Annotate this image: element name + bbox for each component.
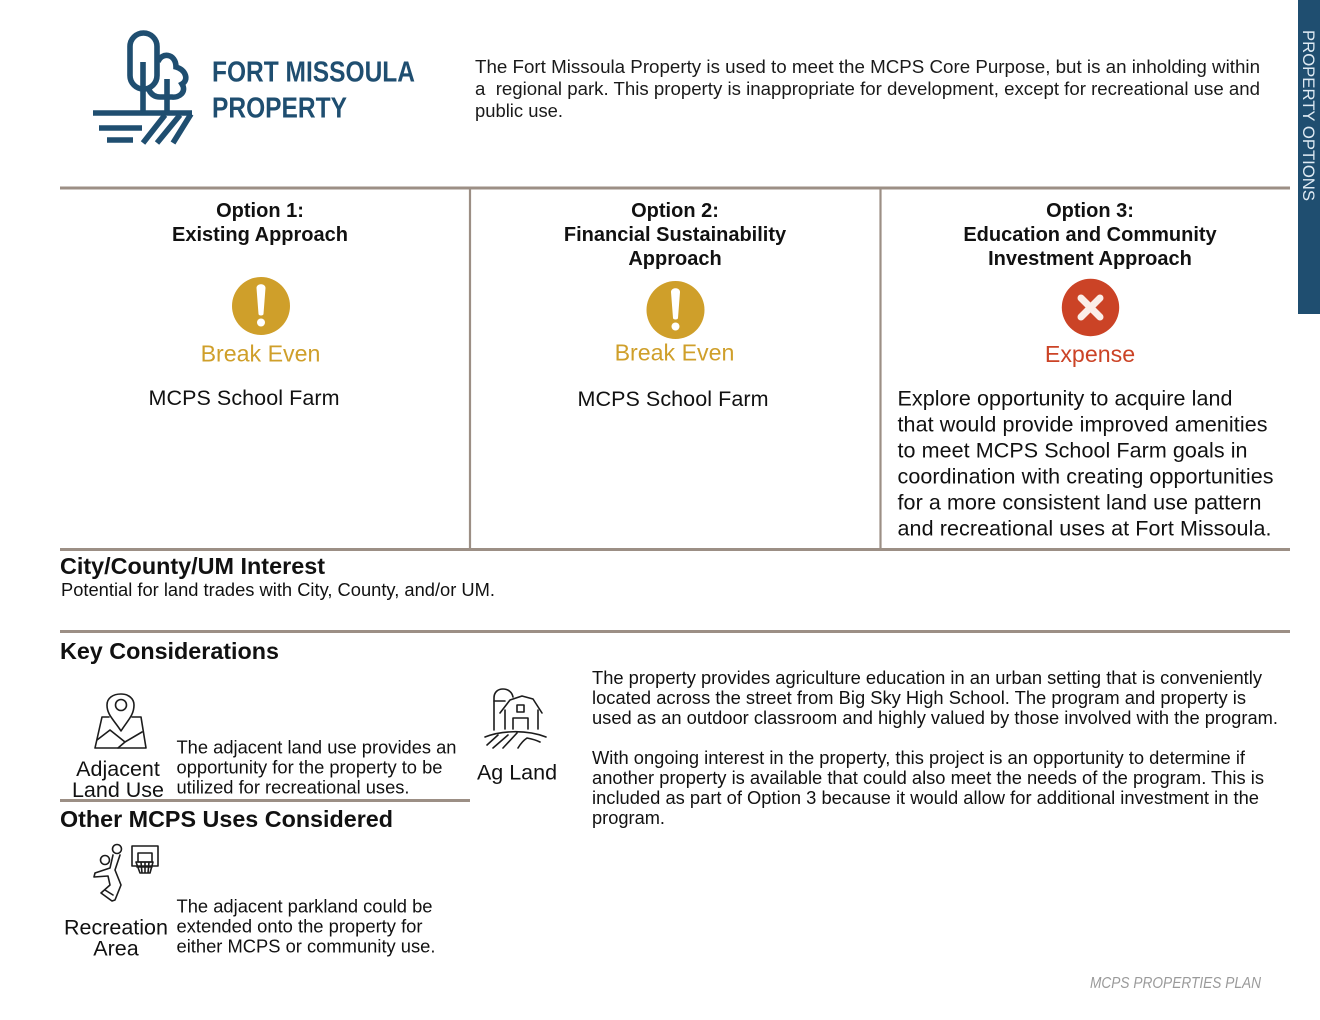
body text: Potential for land trades with City, County, and/or UM. (61, 580, 495, 600)
description (176, 738, 456, 798)
icon: expense cross (1062, 279, 1119, 336)
options table grid (60, 188, 1290, 550)
option 3 heading (963, 200, 1218, 270)
option 3 heading: Option 3: (1046, 200, 1134, 222)
label (64, 916, 168, 960)
icon: trees and field logo (93, 33, 192, 143)
side tab: property options: PROPERTY OPTIONS (1299, 30, 1317, 201)
description: The adjacent parkland could be (176, 896, 432, 916)
section: city county UM interest (60, 553, 495, 600)
description: opportunity for the property to be (176, 758, 442, 778)
heading: other MCPS uses considered: Other MCPS Uses Considered (60, 806, 393, 832)
option 2 heading: Approach (628, 248, 722, 270)
text block: ag land description: program. (592, 808, 665, 828)
text block: ag land description: With ongoing interest in the property, this project is an opportunity to determine if (592, 748, 1246, 768)
item: adjacent land use (72, 694, 456, 802)
option 2 heading: Option 2: (631, 200, 719, 222)
option 3 description: that would provide improved amenities (898, 412, 1268, 436)
item: ag land (477, 689, 557, 784)
description: utilized for recreational uses. (176, 778, 410, 798)
text block: ag land description: The property provides agriculture education in an urban setting that is conveniently (592, 668, 1262, 688)
heading: key considerations: Key Considerations (60, 638, 279, 664)
label: Recreation (64, 916, 168, 940)
option 1 heading (172, 200, 348, 246)
icon: break even warning (232, 277, 290, 335)
title: FORT MISSOULA (212, 56, 415, 88)
option 3 description: coordination with creating opportunities (898, 464, 1274, 488)
title: PROPERTY (212, 92, 347, 124)
icon: basketball player and hoop (94, 844, 158, 901)
option 2 description: MCPS School Farm (578, 387, 768, 411)
footer: MCPS PROPERTIES PLAN (1090, 975, 1261, 992)
label: Area (93, 936, 139, 960)
option 1 heading: Option 1: (216, 200, 304, 222)
description: extended onto the property for (176, 916, 422, 936)
option 3 description: to meet MCPS School Farm goals in (898, 438, 1248, 462)
status label: Break Even (615, 340, 734, 366)
description (176, 896, 436, 956)
intro text: a regional park. This property is inappropriate for development, except for recreational use and (475, 79, 1260, 99)
option 3 heading: Investment Approach (988, 248, 1192, 270)
heading: City/County/UM Interest (60, 553, 325, 579)
option 3 description: for a more consistent land use pattern (898, 490, 1262, 514)
status label: Break Even (201, 340, 320, 366)
icon: map pin (95, 694, 146, 748)
option 3 description: Explore opportunity to acquire land (898, 386, 1232, 410)
text block: ag land description (592, 668, 1278, 828)
option 2 heading: Financial Sustainability (564, 224, 787, 246)
option 2 heading (564, 200, 787, 270)
text block: ag land description: another property is available that could also meet the needs of the program. This is (592, 768, 1264, 788)
description: The adjacent land use provides an (176, 738, 456, 758)
icon: break even warning (646, 281, 704, 339)
label (72, 757, 164, 802)
text block: ag land description: located across the street from Big Sky High School. The program and property is (592, 688, 1246, 708)
item: recreation area (64, 844, 436, 960)
panel: option 2 (564, 200, 787, 411)
label: Land Use (72, 778, 164, 802)
text block: ag land description: used as an outdoor classroom and highly valued by those involved with the program. (592, 708, 1278, 728)
status label: Expense (1045, 341, 1135, 367)
option 3 heading: Education and Community (963, 224, 1218, 246)
intro text: The Fort Missoula Property is used to meet the MCPS Core Purpose, but is an inholding within (475, 57, 1260, 77)
description: either MCPS or community use. (176, 936, 436, 956)
label: Adjacent (76, 757, 160, 781)
panel: option 3 (898, 200, 1274, 540)
option 1 heading: Existing Approach (172, 224, 348, 246)
option 1 description: MCPS School Farm (148, 386, 340, 410)
intro text (475, 57, 1260, 121)
text block: ag land description: included as part of Option 3 because it would allow for additional investment in the (592, 788, 1259, 808)
side tab: property options (1298, 0, 1320, 314)
title (212, 56, 415, 124)
panel: option 1 (148, 200, 348, 410)
option 3 description: and recreational uses at Fort Missoula. (898, 516, 1272, 540)
icon: barn and silo (485, 689, 546, 748)
intro text: public use. (475, 101, 563, 121)
label: Ag Land (477, 760, 557, 784)
option 3 description (898, 386, 1274, 540)
